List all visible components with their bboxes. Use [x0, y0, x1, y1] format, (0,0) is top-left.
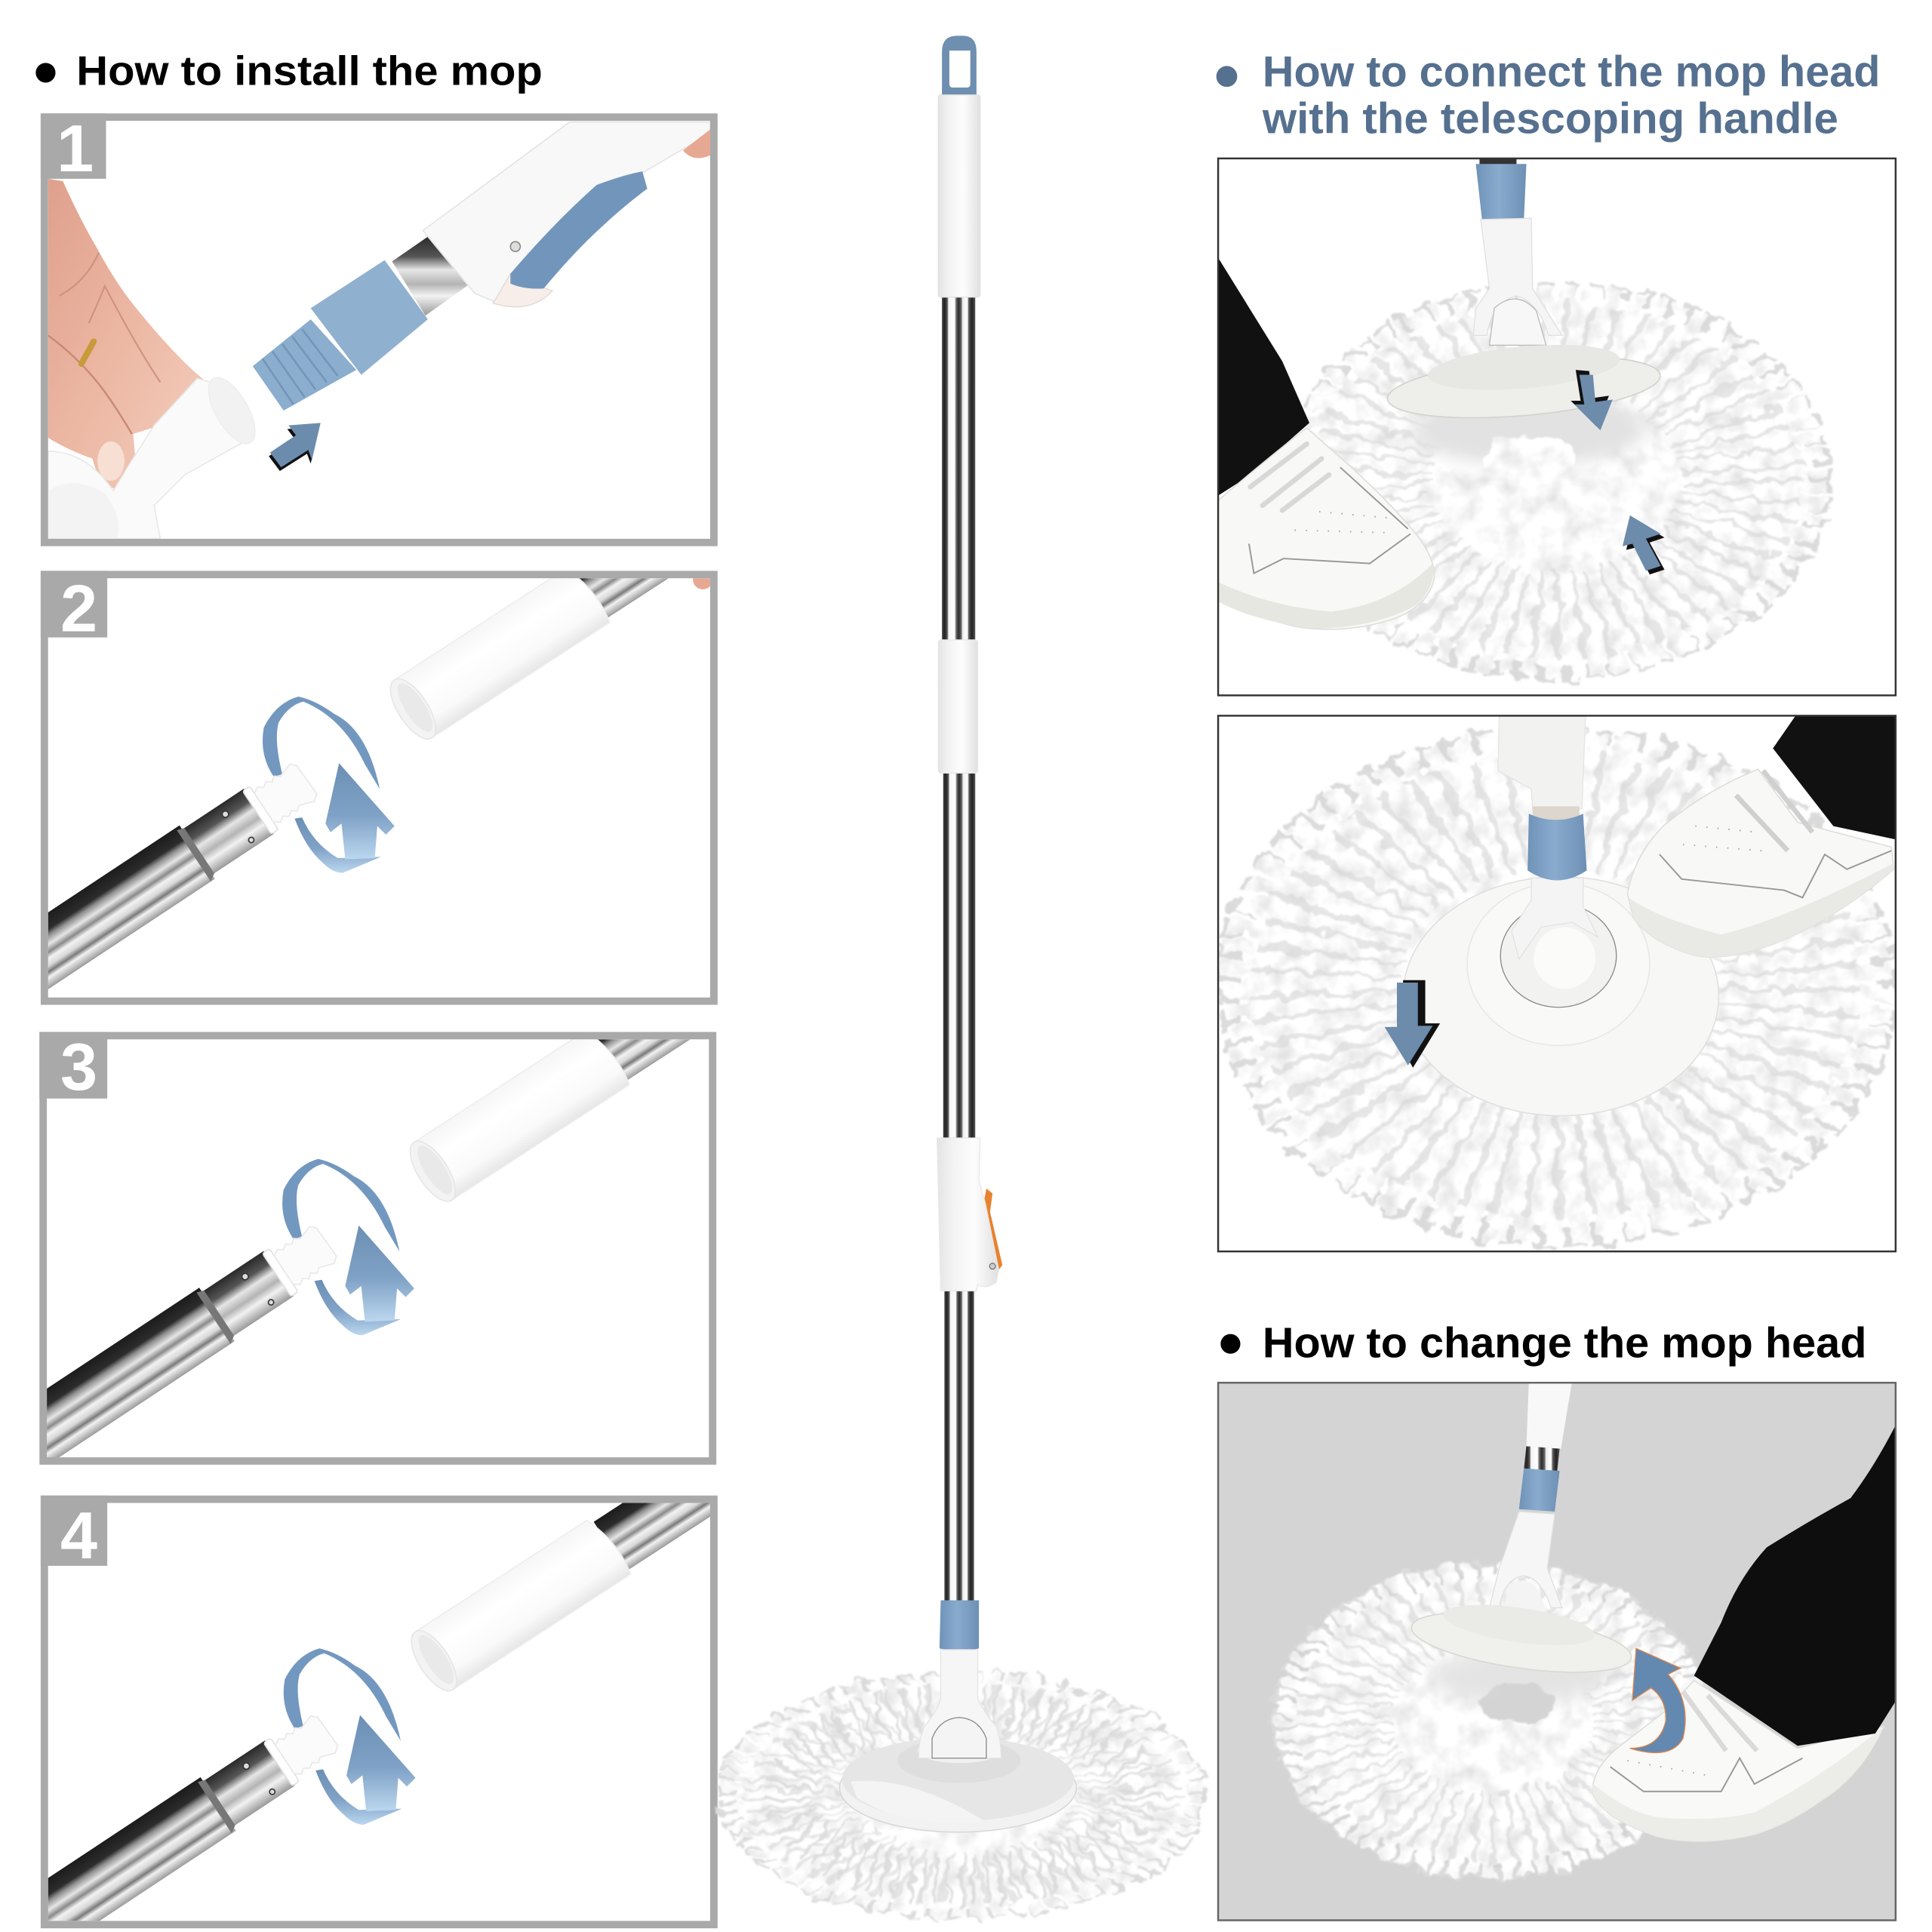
white sneaker — [1218, 428, 1434, 629]
blue stem collar — [1519, 1469, 1560, 1512]
blue stem collar — [1476, 164, 1527, 220]
step 1 illustration — [48, 122, 710, 539]
middle white sleeve — [938, 640, 978, 773]
step 4 number tag — [41, 1496, 107, 1573]
step 1 number tag — [41, 111, 106, 186]
panel: step 1 — [41, 111, 714, 543]
step 2 number tag: 2 — [60, 571, 97, 645]
shaded hollow under disc — [1410, 402, 1647, 468]
tilted spin disc — [1408, 1597, 1635, 1684]
panel: connect, press handle down — [1218, 715, 1897, 1251]
heading: how to connect the mop head — [1217, 48, 1880, 143]
step 3 number tag: 3 — [60, 1029, 97, 1104]
connect scene two frame — [1218, 715, 1896, 1251]
hand holding the connector — [48, 179, 210, 488]
change scene frame — [1218, 1383, 1896, 1920]
connect scene two — [1227, 716, 1897, 1238]
upper white handle — [1498, 716, 1586, 809]
blue threaded connector — [253, 260, 428, 411]
black trouser leg — [1694, 1424, 1897, 1746]
centre hole of fringe — [1479, 1683, 1553, 1722]
blue release lever — [510, 171, 648, 289]
arrow: press down — [1385, 980, 1440, 1068]
handle above collar — [1524, 1382, 1572, 1471]
white fork stem — [1490, 1512, 1562, 1617]
step 2 frame — [45, 574, 714, 1001]
step 4 frame — [45, 1500, 714, 1924]
mop head fringe — [1291, 290, 1822, 672]
panel: change the mop head — [1218, 1382, 1897, 1921]
step 1 number tag: 1 — [57, 111, 94, 186]
tilted spin disc — [1385, 338, 1663, 427]
white fork stem — [1512, 878, 1598, 959]
black trouser leg — [1218, 257, 1309, 496]
arrow: push together — [269, 423, 321, 471]
centre hole of fringe — [1482, 435, 1576, 471]
heading: how to install the mop: How to install the mop — [76, 48, 543, 94]
spin disc from above — [1403, 877, 1718, 1115]
white sneaker — [1627, 769, 1894, 957]
curved arrow: lift up — [1630, 1648, 1685, 1752]
step 1 frame — [45, 117, 714, 543]
metal tube and collar — [1527, 806, 1587, 880]
white sneaker — [1592, 1681, 1884, 1841]
lock clamp with orange lever — [937, 1138, 1002, 1291]
grey panel background — [1218, 1382, 1897, 1921]
black trouser leg — [1773, 716, 1897, 840]
upper handle body — [392, 122, 710, 315]
panel: step 2 — [0, 438, 804, 1069]
spin disc — [840, 1737, 1076, 1832]
heading: how to connect the mop head: with the telescoping handle — [1262, 94, 1838, 143]
stainless steel shaft — [942, 290, 975, 1607]
panel: step 4 — [0, 1390, 825, 1932]
connect scene one frame — [1218, 158, 1896, 695]
white fork stem — [918, 1650, 1001, 1758]
top white sleeve — [938, 95, 980, 297]
connect scene one — [1218, 158, 1822, 672]
step 2 illustration: twist on white connector — [0, 438, 804, 1069]
shaded hollow under disc — [1430, 1650, 1607, 1704]
step 3 frame — [43, 1035, 712, 1461]
arrow: down onto mop — [1571, 370, 1613, 430]
step 4 illustration — [0, 1390, 825, 1932]
step 3 number tag — [39, 1029, 107, 1104]
central mop head fringe — [726, 1675, 1197, 1915]
assembled telescoping mop — [726, 35, 1197, 1915]
change scene — [1280, 1382, 1897, 1873]
step 4 number tag: 4 — [60, 1498, 97, 1573]
arrow: up from below mop — [1623, 515, 1664, 574]
blue stem collar — [940, 1601, 979, 1651]
handle shaft end — [1479, 159, 1517, 165]
heading: how to change the mop head: How to change the mop head — [1263, 1319, 1866, 1367]
white fork stem — [1473, 218, 1562, 345]
mop head fringe — [1227, 735, 1885, 1238]
white mop connector — [48, 371, 264, 539]
panel: connect, step on mop head — [1218, 158, 1896, 695]
hanging loop — [942, 35, 977, 99]
panel: step 3 — [0, 900, 824, 1532]
step 3 illustration — [0, 900, 824, 1532]
heading: how to connect the mop head: How to connect the mop head — [1263, 48, 1880, 96]
step 2 number tag — [41, 571, 107, 645]
mop head fringe — [1280, 1567, 1703, 1873]
